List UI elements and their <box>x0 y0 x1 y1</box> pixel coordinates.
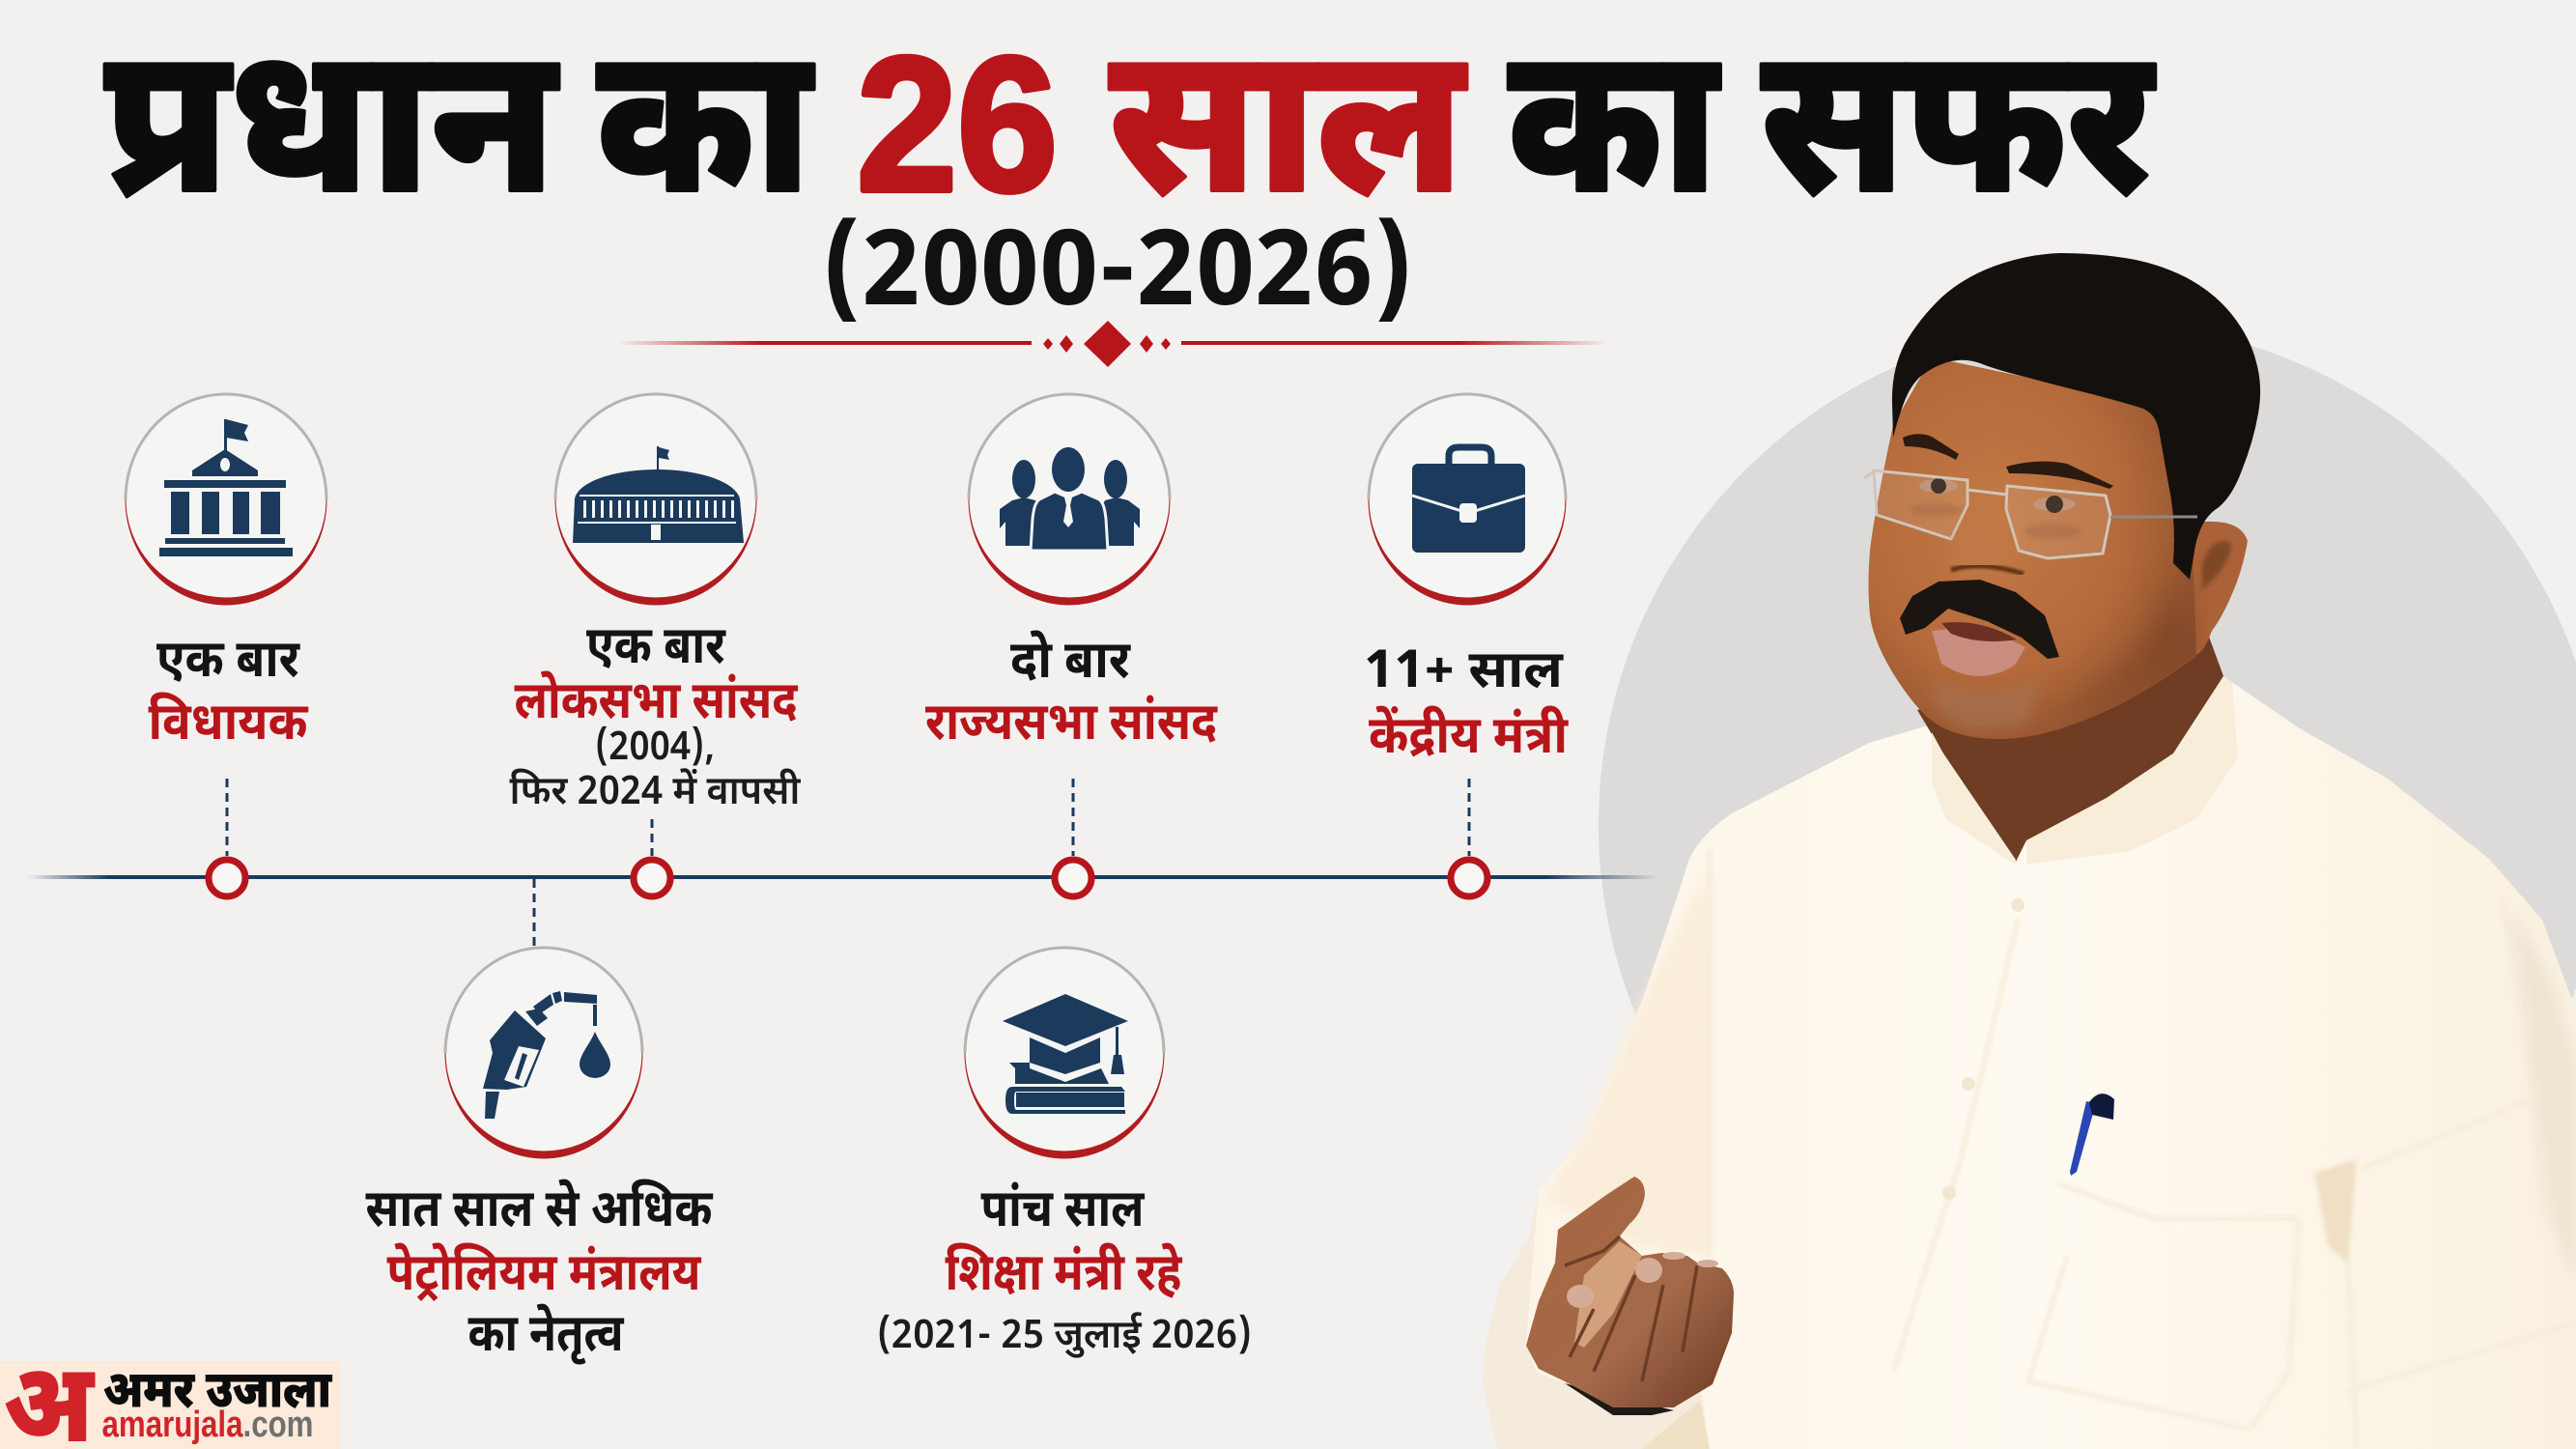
ornamental divider <box>618 321 1608 367</box>
label: लोकसभा सांसद <box>514 670 799 740</box>
title: का <box>597 9 815 273</box>
title: साल <box>1109 9 1467 273</box>
milestone 5: Petroleum ministry <box>365 948 714 1373</box>
milestone 1: MLA <box>126 394 326 761</box>
icon: graduation cap on books <box>1003 994 1128 1114</box>
label: केंद्रीय मंत्री <box>1369 705 1569 775</box>
label <box>510 617 802 820</box>
label: फिर 2024 में वापसी <box>510 768 802 820</box>
title: का <box>1509 9 1721 273</box>
label: (2021- 25 जुलाई 2026) <box>877 1312 1252 1364</box>
kurta folds <box>1708 850 2576 1449</box>
timeline line <box>27 875 1659 879</box>
under-eye shading <box>1910 503 2081 539</box>
label: 11+ साल <box>1364 641 1564 709</box>
sleeve shading <box>2511 908 2576 1285</box>
hand <box>1526 1177 1734 1407</box>
moustache <box>1900 580 2059 659</box>
kurta body <box>1483 667 2576 1449</box>
hair <box>1892 253 2260 580</box>
title: प्रधान <box>104 9 559 273</box>
title <box>104 9 2156 273</box>
label: विधायक <box>149 692 309 761</box>
label: एक बार <box>586 617 726 685</box>
milestone 2: Lok Sabha MP <box>510 394 802 820</box>
fingernails <box>1567 1252 1718 1308</box>
icon: parliament building <box>573 446 744 543</box>
icon: legislature building <box>159 419 293 556</box>
title: 26 <box>857 17 1058 231</box>
icon: fuel nozzle with drop <box>483 991 610 1119</box>
icon: briefcase <box>1412 447 1525 553</box>
label <box>365 1179 714 1373</box>
title: सफर <box>1762 9 2156 273</box>
icon circle <box>969 394 1170 605</box>
grey circle behind portrait <box>1599 323 2576 1327</box>
label <box>1364 641 1569 775</box>
label: दो बार <box>1010 630 1131 699</box>
milestone 4: Union minister <box>1364 394 1569 775</box>
logo: Amar Ujala: amarujala.com <box>102 1405 314 1445</box>
eyebrows <box>1903 434 1959 460</box>
label: शिक्षा मंत्री रहे <box>945 1242 1183 1312</box>
subtitle: years: (2000-2026) <box>821 212 1414 348</box>
pen in pocket <box>2070 1094 2114 1176</box>
label: एक बार <box>156 631 300 698</box>
icon circle <box>555 394 756 605</box>
icon circle <box>965 948 1164 1158</box>
buttons <box>1942 898 2024 1200</box>
face <box>1868 357 2196 739</box>
timeline connectors <box>227 779 1469 947</box>
label: पेट्रोलियम मंत्रालय <box>386 1242 702 1312</box>
glasses <box>1864 470 2197 558</box>
ear <box>2185 522 2248 655</box>
mouth <box>1932 622 2025 676</box>
timeline markers <box>209 860 1487 896</box>
palm <box>1574 1241 1642 1348</box>
label: का नेतृत्व <box>467 1303 625 1373</box>
milestone 6: Education minister <box>877 948 1252 1364</box>
portrait of the minister <box>1483 253 2576 1449</box>
label: पांच साल <box>981 1180 1145 1248</box>
nose <box>1943 512 2024 576</box>
icon circle <box>445 948 642 1158</box>
label: सात साल से अधिक <box>365 1179 714 1248</box>
logo: Amar Ujala: अमर उजाला <box>103 1362 332 1428</box>
milestone 3: Rajya Sabha MP <box>925 394 1218 761</box>
left cuff <box>1483 1191 1710 1449</box>
jaw and chin shading <box>1932 676 2038 732</box>
label <box>149 631 309 761</box>
label <box>925 630 1218 761</box>
label <box>877 1180 1252 1364</box>
fingers <box>1565 1236 1697 1381</box>
logo: Amar Ujala <box>0 1344 340 1449</box>
label: (2004), <box>595 724 715 776</box>
wrist band <box>1565 1383 1674 1415</box>
label: राज्यसभा सांसद <box>925 694 1218 761</box>
eyes <box>1919 478 2076 513</box>
neck <box>1917 618 2223 862</box>
icon circle <box>126 394 326 605</box>
collar <box>1932 732 2016 865</box>
icon: group of people <box>1000 447 1140 551</box>
icon circle <box>1369 394 1566 605</box>
